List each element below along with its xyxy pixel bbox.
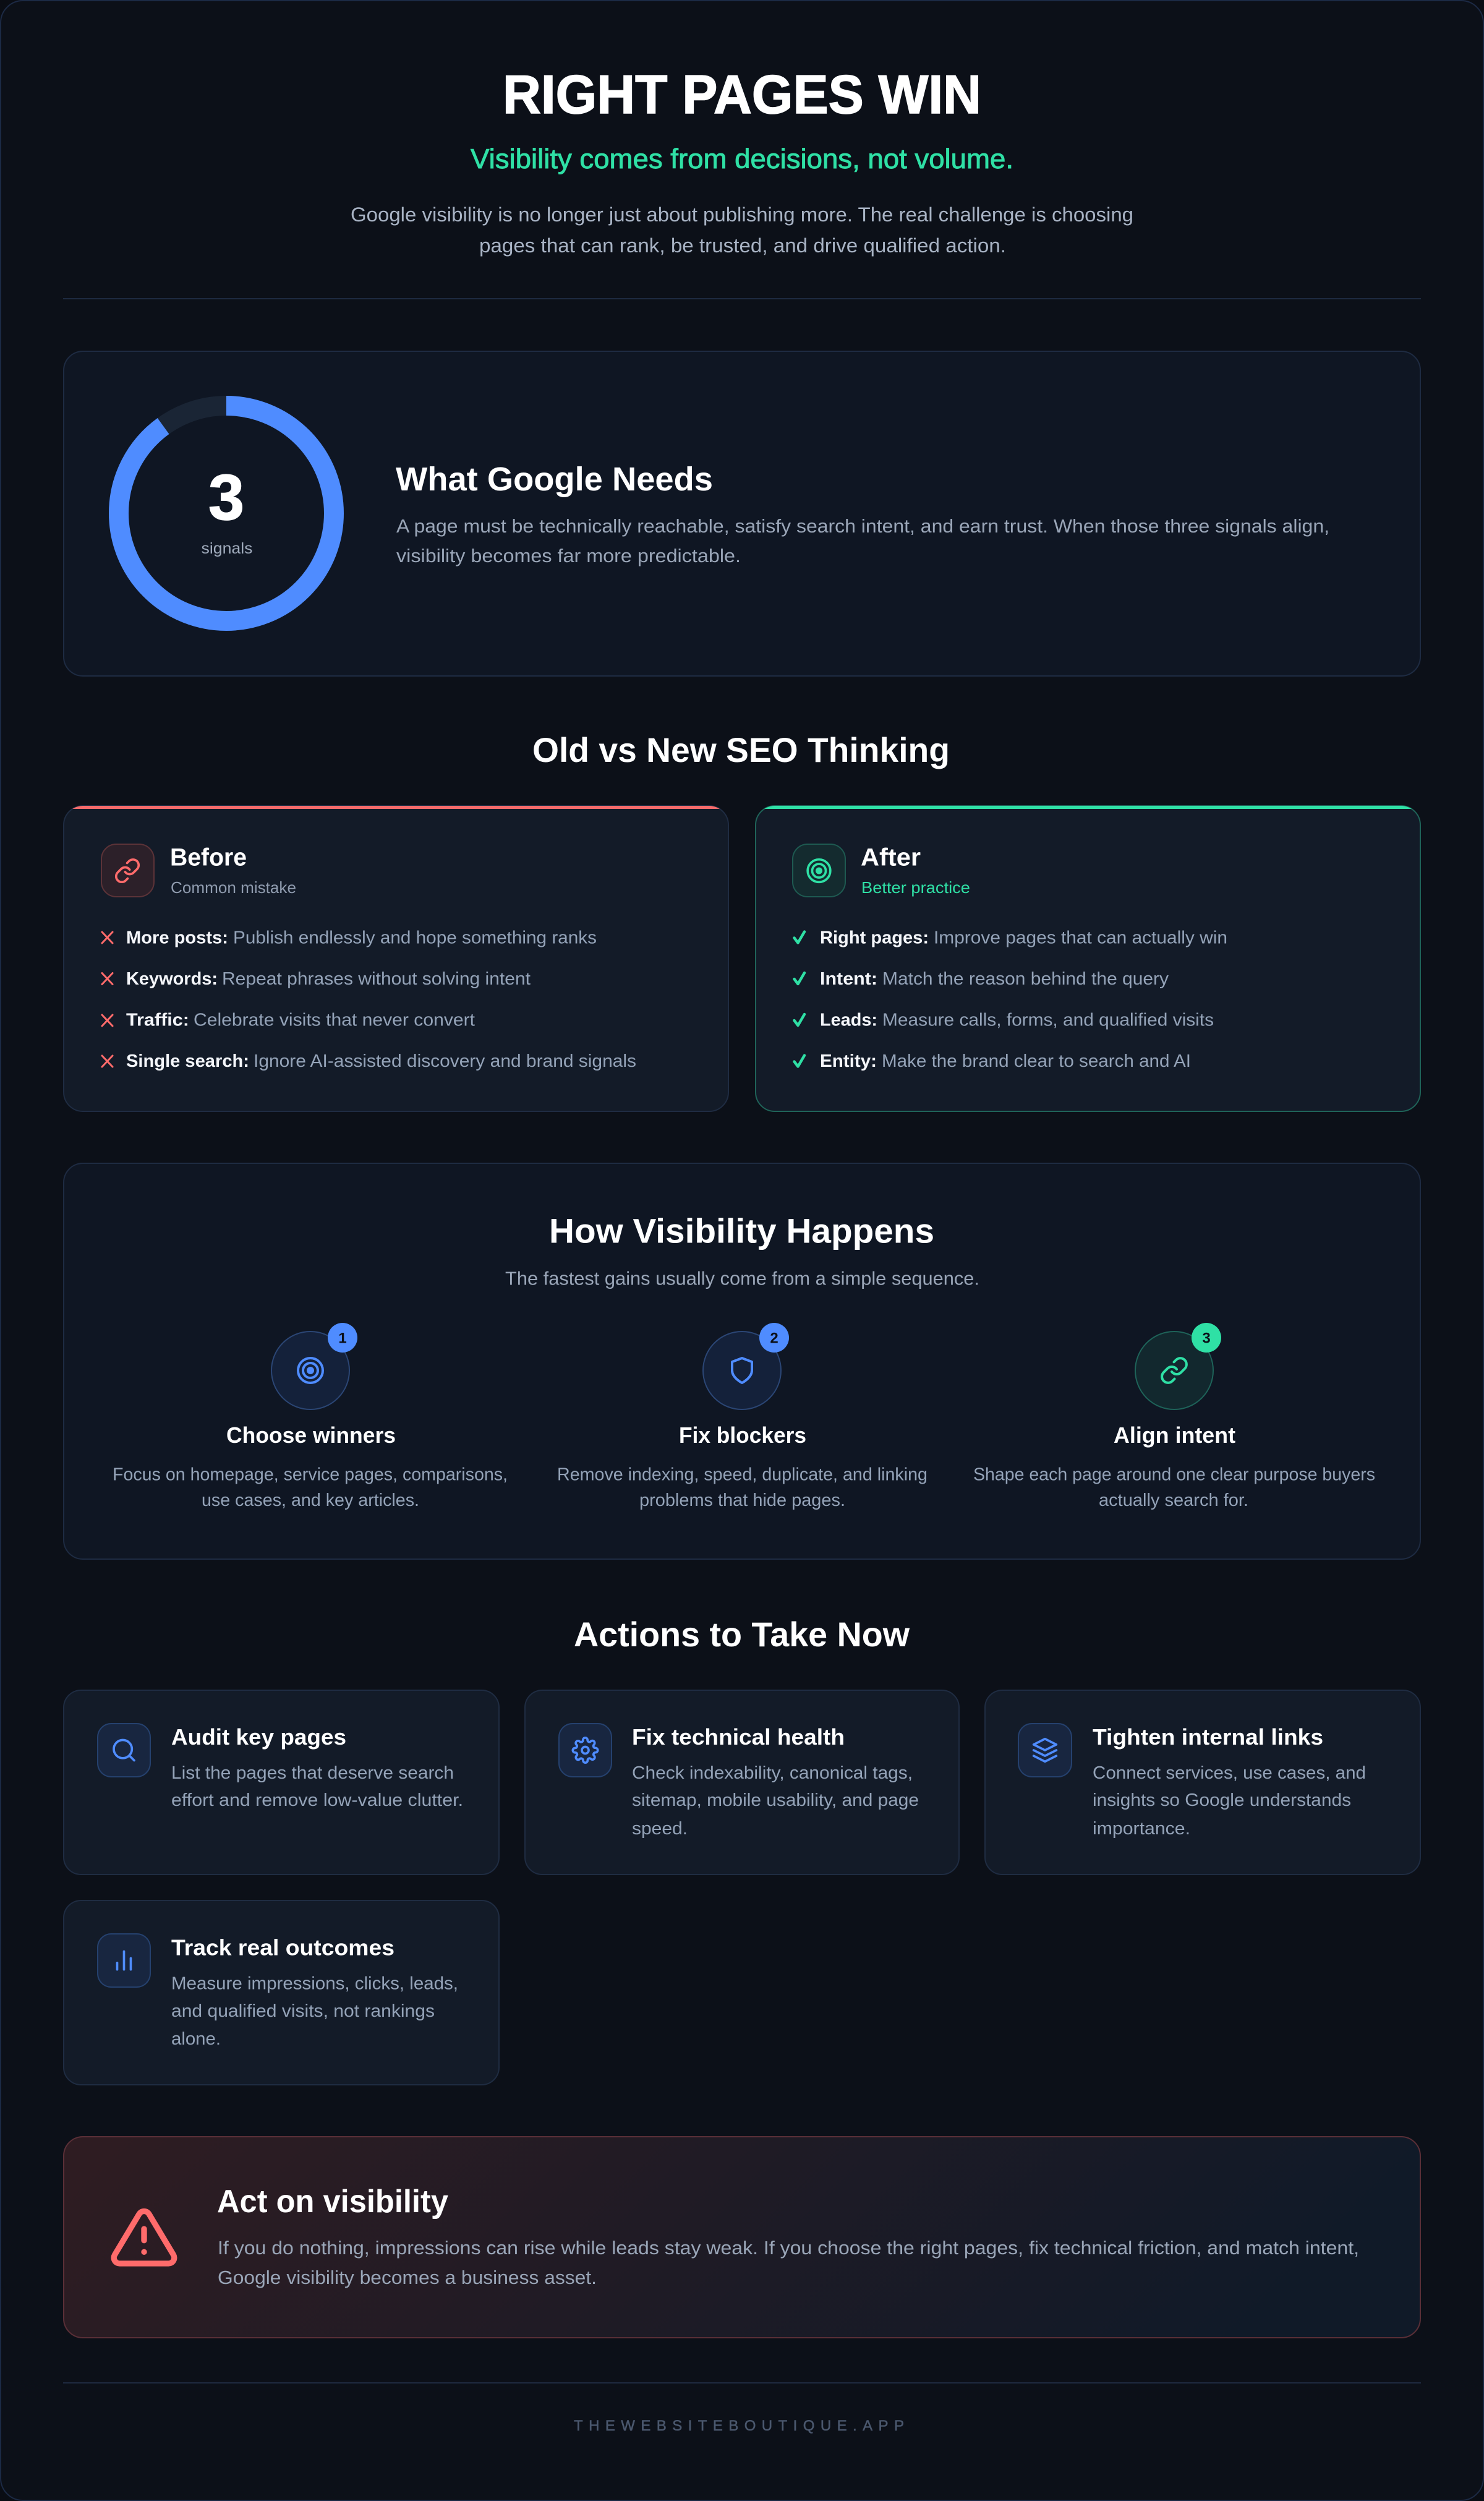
card: track real outcomes	[64, 1900, 499, 2085]
step 3: 3	[1202, 1330, 1211, 1347]
step 1: Focus on homepage, service pages, comparisons,	[113, 1464, 508, 1484]
step 3: Shape each page around one clear purpose buyers	[973, 1464, 1375, 1484]
footer: THEWEBSITEBOUTIQUE.APP	[574, 2418, 904, 2434]
card: tighten internal links: insights so Google understands	[1093, 1790, 1351, 1810]
list of mistakes: More posts:	[126, 928, 228, 947]
step 3: Align intent	[1114, 1422, 1235, 1448]
list of mistakes: Repeat phrases without solving intent	[222, 969, 531, 989]
card: tighten internal links: importance.	[1093, 1819, 1190, 1839]
callout: act on visibility: Google visibility becomes a business asset.	[218, 2267, 597, 2288]
card: audit key pages: Audit key pages	[171, 1724, 346, 1750]
list of mistakes: Celebrate visits that never convert	[194, 1011, 475, 1030]
list of practices: Entity:	[820, 1051, 877, 1071]
list of practices: Intent:	[820, 969, 877, 989]
step 2	[557, 1323, 927, 1510]
intro text: Google visibility is no longer just about publishing more. The real challenge is choosing	[351, 203, 1133, 226]
donut chart: 3 signals	[119, 406, 334, 621]
card: fix technical health	[525, 1690, 959, 1875]
list of mistakes: Keywords:	[126, 969, 218, 989]
card: audit key pages	[64, 1690, 499, 1875]
icon: search	[98, 1724, 150, 1777]
heading: What Google Needs	[396, 461, 713, 498]
step 1	[113, 1323, 508, 1510]
donut chart: 3 signals: 3	[208, 462, 244, 534]
list of practices	[794, 928, 1227, 1071]
card: track real outcomes: and qualified visits, not rankings	[171, 2001, 435, 2021]
icon: layers	[1018, 1724, 1072, 1777]
step 3: actually search for.	[1099, 1490, 1248, 1510]
card background	[756, 806, 1420, 1111]
list of practices: Improve pages that can actually win	[934, 928, 1227, 947]
card subtitle: Better practice	[861, 878, 970, 897]
intro text	[351, 203, 1133, 257]
step 2: problems that hide pages.	[639, 1490, 845, 1510]
list of mistakes: Single search:	[126, 1051, 249, 1071]
list of mistakes: Traffic:	[126, 1011, 189, 1030]
card: fix technical health: speed.	[632, 1819, 688, 1839]
list of practices: Make the brand clear to search and AI	[882, 1051, 1191, 1071]
list of practices: Right pages:	[820, 928, 929, 947]
subheading: The fastest gains usually come from a simple sequence.	[505, 1268, 979, 1289]
intro text: pages that can rank, be trusted, and drive qualified action.	[479, 234, 1006, 257]
callout: act on visibility: Act on visibility	[217, 2184, 448, 2220]
list of mistakes	[102, 928, 636, 1071]
panel: how visibility happens	[64, 1163, 1420, 1559]
card: fix technical health: sitemap, mobile usability, and page	[632, 1790, 919, 1810]
panel: before	[63, 805, 729, 1111]
callout: act on visibility	[64, 2137, 1420, 2338]
title: RIGHT PAGES WIN	[503, 64, 981, 125]
icon: link	[101, 844, 154, 897]
subtitle: Visibility comes from decisions, not volume.	[471, 144, 1013, 174]
step 3	[973, 1323, 1375, 1510]
panel background	[64, 351, 1420, 676]
card: track real outcomes: alone.	[171, 2029, 221, 2049]
heading: How Visibility Happens	[549, 1211, 934, 1250]
green top accent	[764, 806, 1412, 809]
card title: After	[861, 844, 921, 871]
card: tighten internal links	[985, 1690, 1420, 1875]
card subtitle: Common mistake	[171, 878, 296, 897]
card: fix technical health: Fix technical health	[632, 1724, 845, 1750]
list of practices: Measure calls, forms, and qualified visits	[882, 1011, 1214, 1030]
callout: act on visibility: If you do nothing, impressions can rise while leads stay weak. If you choose the right pages, fix technical friction, and match intent,	[218, 2238, 1359, 2259]
red top accent	[72, 806, 720, 809]
panel: after	[755, 805, 1421, 1111]
panel: what google needs	[64, 351, 1420, 676]
step 1: Choose winners	[226, 1422, 396, 1448]
description	[396, 516, 1329, 566]
card title: Before	[170, 844, 247, 871]
icon: bar chart	[98, 1934, 150, 1987]
panel background	[64, 1163, 1420, 1559]
card: track real outcomes: Track real outcomes	[171, 1935, 394, 1960]
step 1: 1	[338, 1330, 347, 1347]
step 1: use cases, and key articles.	[202, 1490, 419, 1510]
card: audit key pages: List the pages that deserve search	[171, 1763, 454, 1783]
step 2: Fix blockers	[679, 1422, 806, 1448]
description: visibility becomes far more predictable.	[396, 545, 741, 566]
card: audit key pages: effort and remove low-value clutter.	[171, 1790, 463, 1810]
list of mistakes: Ignore AI-assisted discovery and brand signals	[254, 1051, 636, 1071]
card: track real outcomes: Measure impressions, clicks, leads,	[171, 1974, 458, 1994]
icon: warning triangle	[114, 2212, 174, 2264]
card background	[64, 806, 728, 1111]
header	[351, 64, 1133, 257]
list of practices: Match the reason behind the query	[882, 969, 1169, 989]
list of practices: Leads:	[820, 1011, 877, 1030]
step 2: 2	[770, 1330, 778, 1347]
card: fix technical health: Check indexability, canonical tags,	[632, 1763, 913, 1783]
card: tighten internal links: Tighten internal links	[1093, 1724, 1323, 1750]
donut chart: 3 signals: signals	[202, 540, 252, 557]
heading: actions: Actions to Take Now	[574, 1615, 910, 1654]
description: A page must be technically reachable, satisfy search intent, and earn trust. When those three signals align,	[396, 516, 1329, 537]
heading: old vs new: Old vs New SEO Thinking	[532, 730, 950, 769]
list of mistakes: Publish endlessly and hope something ranks	[233, 928, 597, 947]
step 2: Remove indexing, speed, duplicate, and linking	[557, 1464, 927, 1484]
card: tighten internal links: Connect services, use cases, and	[1093, 1763, 1366, 1783]
icon: settings gear	[559, 1724, 612, 1777]
icon: target	[793, 844, 845, 897]
